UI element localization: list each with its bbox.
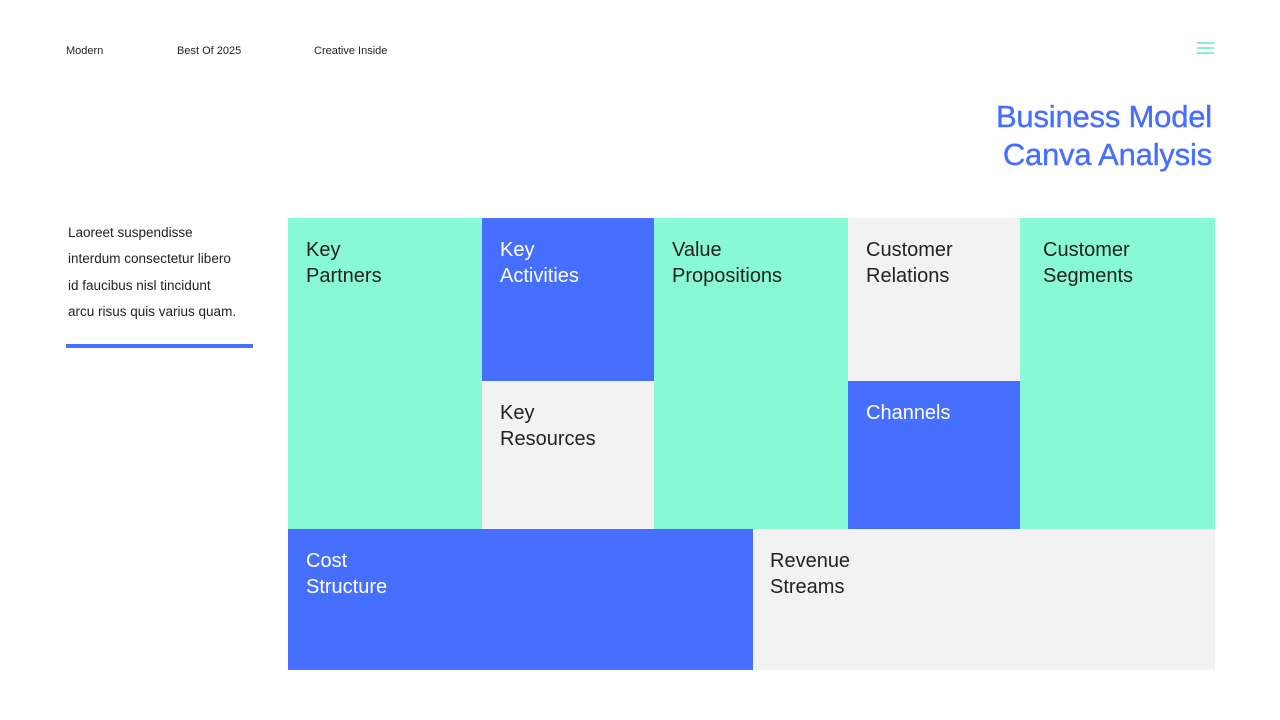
panel: revenue streams: Streams: [770, 576, 844, 598]
panel: key activities: [482, 218, 654, 381]
panel: customer segments: [1020, 218, 1215, 529]
panel: key resources: [482, 381, 654, 529]
panel: value propositions: Value: [672, 239, 722, 261]
panel: cost structure: Cost: [306, 550, 347, 572]
panel: key partners: Partners: [306, 265, 382, 287]
text block: description: interdum consectetur libero: [68, 251, 231, 266]
icon: menu: [1197, 42, 1214, 54]
title: Canva Analysis: [1003, 137, 1212, 172]
title: Business Model: [996, 99, 1212, 134]
text block: description: [68, 225, 236, 319]
panel: key partners: Key: [306, 239, 340, 261]
panel: cost structure: [288, 529, 753, 670]
nav: Modern: Modern: [66, 45, 103, 57]
panel: key partners: [288, 218, 482, 529]
panel: customer segments: Segments: [1043, 265, 1133, 287]
panel: value propositions: Propositions: [672, 265, 782, 287]
canvas grid: [288, 218, 1215, 670]
text block: description: arcu risus quis varius quam.: [68, 304, 236, 319]
panel: key resources: Key: [500, 402, 534, 424]
panel: key activities: Activities: [500, 265, 579, 287]
text block: description: Laoreet suspendisse: [68, 225, 193, 240]
panel: channels: Channels: [866, 402, 951, 424]
panel: customer relations: [848, 218, 1020, 381]
panel: revenue streams: Revenue: [770, 550, 850, 572]
panel: channels: [848, 381, 1020, 529]
nav: Creative Inside: Creative Inside: [314, 45, 387, 57]
panel: customer segments: Customer: [1043, 239, 1130, 261]
panel: customer relations: Relations: [866, 265, 949, 287]
panel: customer relations: Customer: [866, 239, 953, 261]
nav: Best Of 2025: Best Of 2025: [177, 45, 241, 57]
panel: value propositions: [654, 218, 848, 529]
panel: cost structure: Structure: [306, 576, 387, 598]
text block: description: id faucibus nisl tincidunt: [68, 278, 211, 293]
panel: key activities: Key: [500, 239, 534, 261]
panel: key resources: Resources: [500, 428, 596, 450]
title: [996, 99, 1212, 172]
panel: revenue streams: [753, 529, 1215, 670]
accent line: [66, 344, 253, 348]
